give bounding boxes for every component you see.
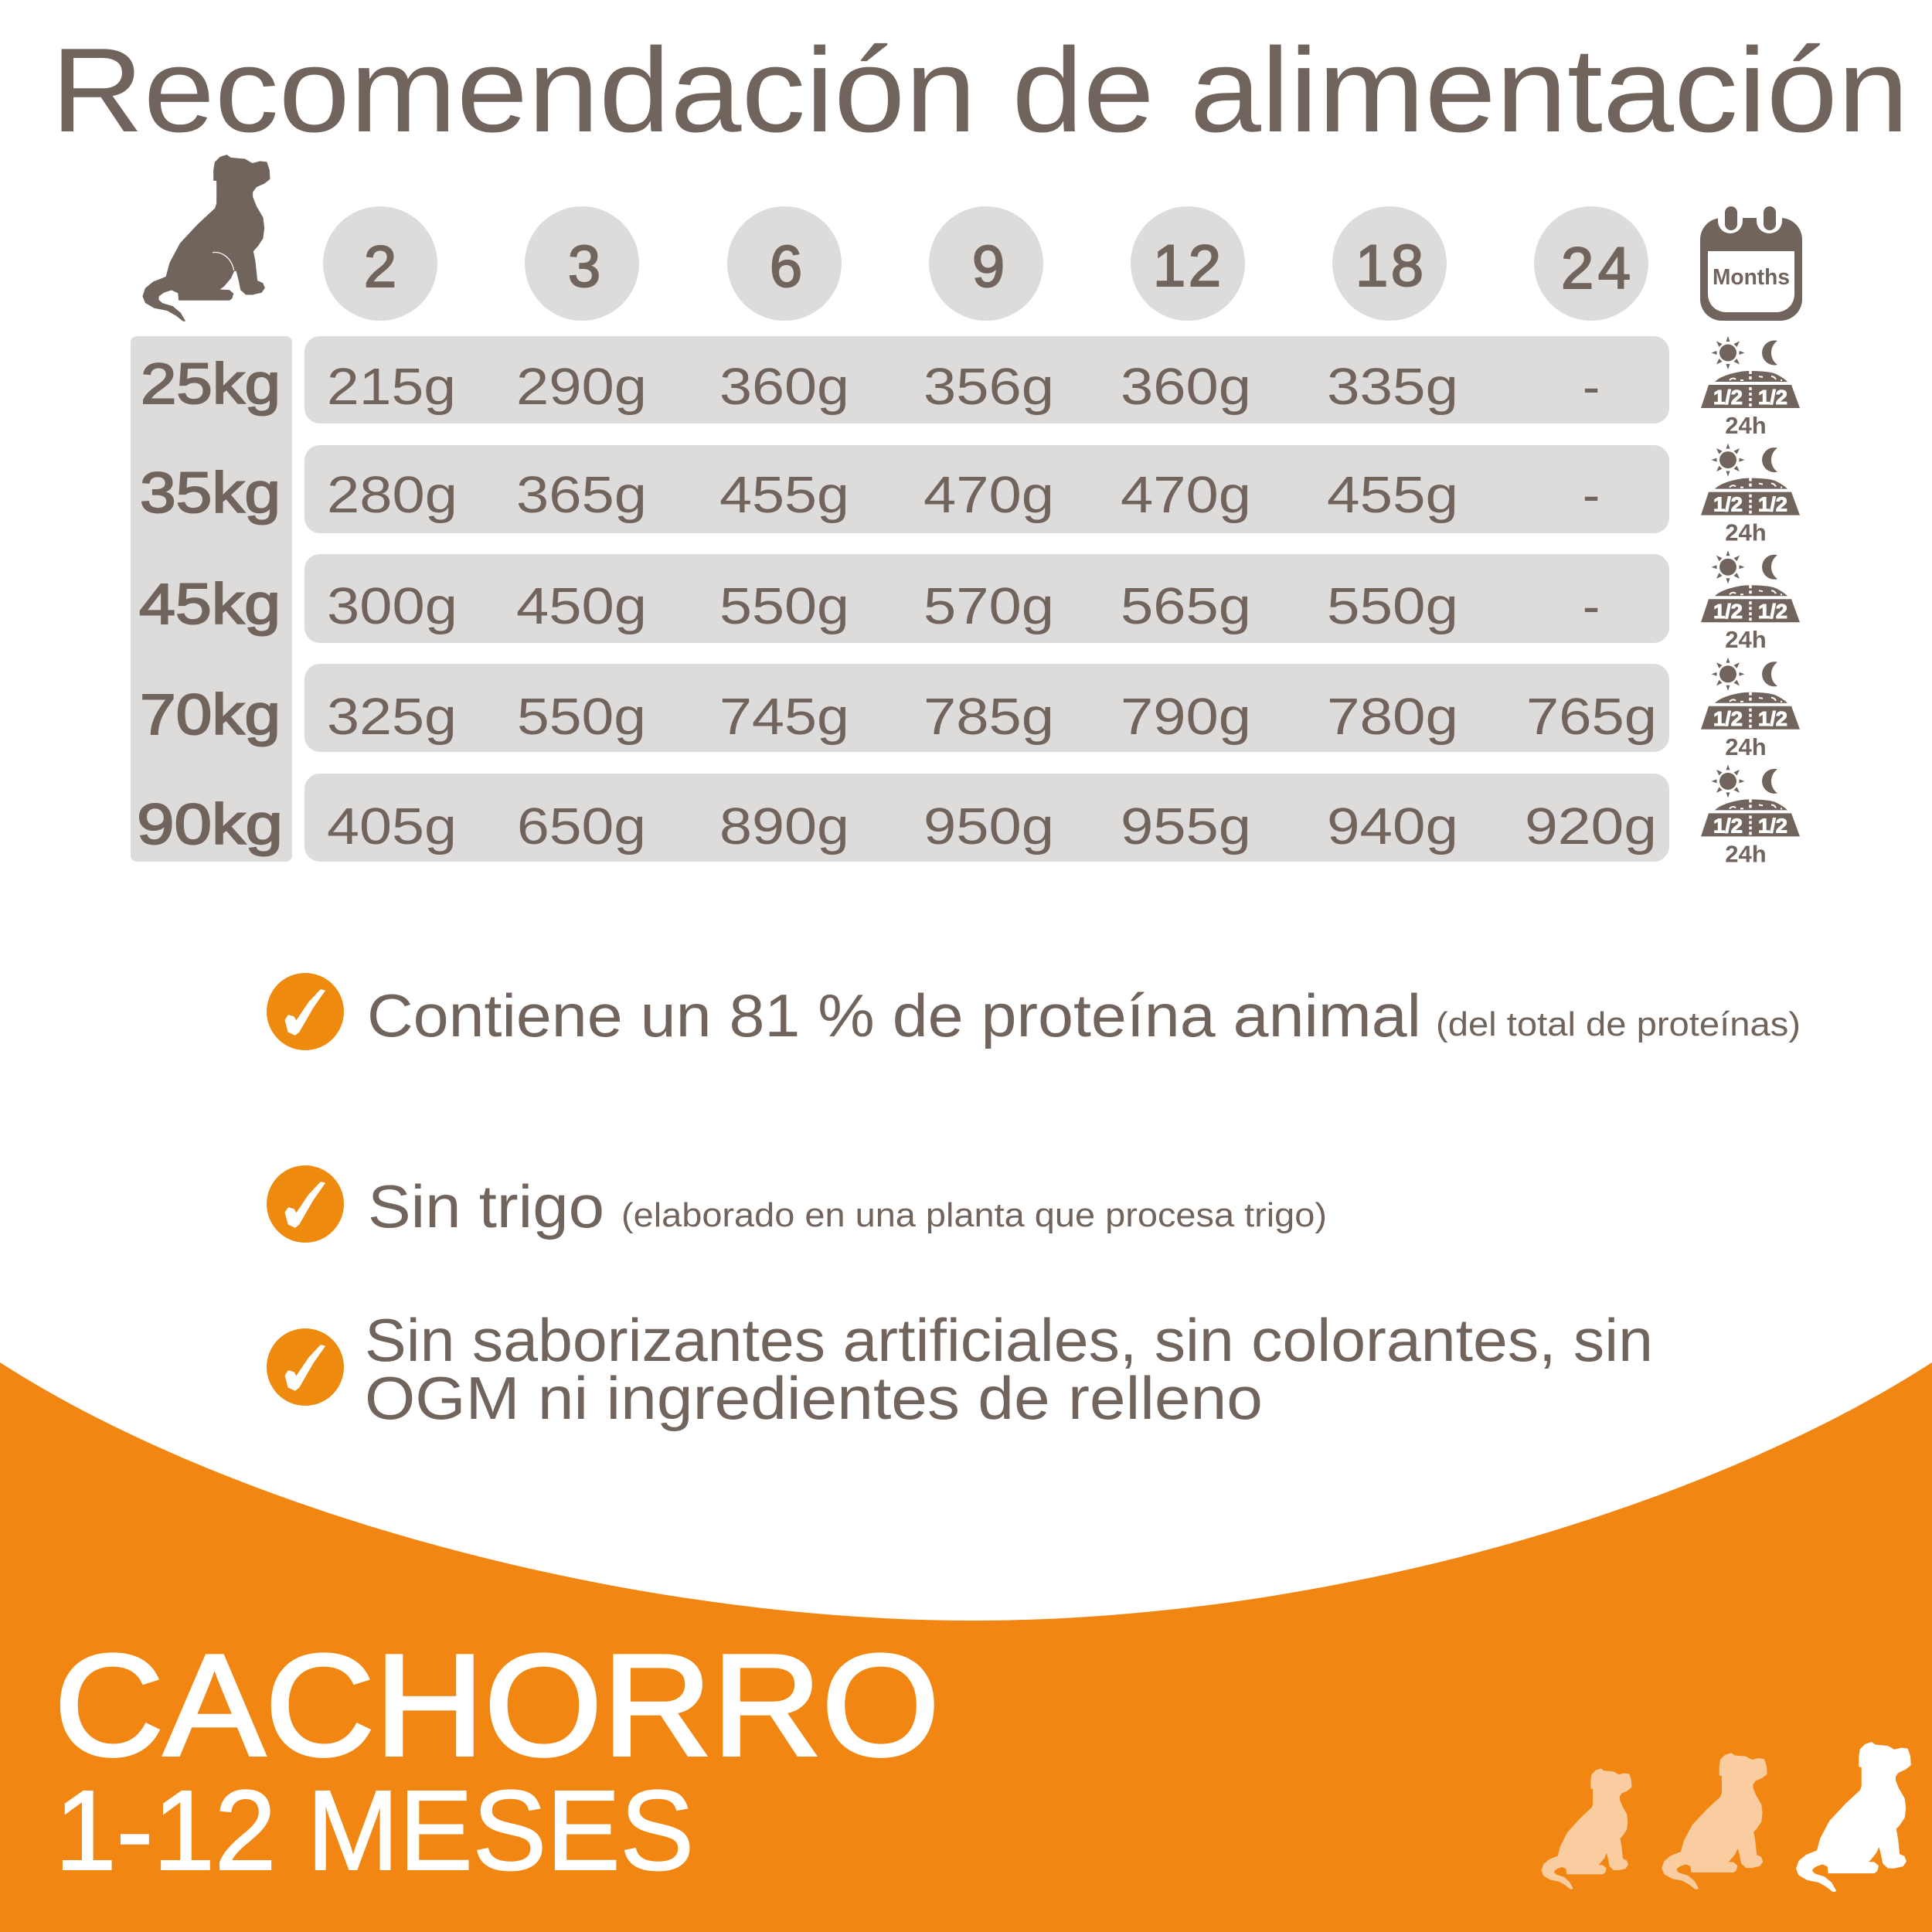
month 6 bbox=[727, 206, 842, 321]
row: 25kg bbox=[304, 336, 1669, 423]
icon: meal split row 4 bbox=[1701, 658, 1800, 760]
benefit: no wheat: (elaborado en una planta que procesa trigo) bbox=[621, 1196, 1327, 1234]
subheading: age range: 1-12 MESES bbox=[55, 1767, 694, 1894]
weight labels: 90kg bbox=[137, 792, 283, 856]
weight labels: 35kg bbox=[140, 461, 281, 525]
icon: meal split row 5: 24h bbox=[1725, 840, 1767, 867]
row: 90kg: 890g bbox=[719, 798, 849, 855]
icon: months calendar bbox=[1700, 206, 1802, 321]
icon: meal split row 3: 1/2 bbox=[1758, 600, 1787, 623]
icon: seated dog bbox=[143, 155, 270, 321]
row: 35kg: 470g bbox=[923, 466, 1054, 524]
benefit: no wheat bbox=[267, 1165, 1327, 1243]
benefit: animal protein bbox=[267, 973, 1801, 1050]
weight labels: 25kg bbox=[141, 352, 281, 416]
row: 90kg: 955g bbox=[1121, 798, 1251, 855]
row: 70kg: 790g bbox=[1121, 688, 1251, 746]
row: 90kg: 940g bbox=[1327, 798, 1458, 855]
month 18 bbox=[1332, 206, 1447, 321]
month 9: 9 bbox=[972, 234, 1005, 300]
row: 90kg: 650g bbox=[517, 798, 646, 855]
icon: meal split row 4: 24h bbox=[1725, 733, 1767, 760]
icon: meal split row 4: 1/2 bbox=[1713, 707, 1743, 730]
icon: small puppy bbox=[1543, 1770, 1631, 1888]
row: 45kg: 550g bbox=[719, 577, 849, 635]
icon: months calendar: Months bbox=[1713, 265, 1790, 290]
icon: meal split row 1: 24h bbox=[1725, 412, 1767, 439]
icon: meal split row 5: 1/2 bbox=[1713, 814, 1743, 837]
icon: meal split row 3 bbox=[1701, 550, 1800, 653]
month 3: 3 bbox=[568, 234, 600, 300]
row: 35kg: 455g bbox=[1327, 466, 1458, 524]
weight labels: 70kg bbox=[140, 682, 281, 747]
month 12 bbox=[1131, 206, 1245, 321]
row: 90kg: 920g bbox=[1525, 798, 1657, 855]
title: Recomendación de alimentación bbox=[51, 23, 1909, 157]
benefit: animal protein: (del total de proteínas) bbox=[1436, 1005, 1801, 1043]
row: 25kg: 215g bbox=[327, 358, 456, 416]
row: 45kg: - bbox=[1583, 577, 1600, 635]
month 18: 18 bbox=[1355, 233, 1423, 299]
row: 90kg: 950g bbox=[923, 798, 1054, 855]
orange curved banner bbox=[0, 1362, 1932, 1932]
month 3 bbox=[525, 206, 639, 321]
icon: meal split row 1: 1/2 bbox=[1758, 386, 1787, 409]
row: 70kg bbox=[304, 664, 1669, 752]
row: 25kg: 335g bbox=[1327, 358, 1458, 416]
row: 70kg: 765g bbox=[1526, 688, 1657, 746]
benefit: animal protein: Contiene un 81 % de proteína animal bbox=[367, 981, 1421, 1049]
row: 45kg: 300g bbox=[327, 577, 457, 635]
weight labels bbox=[137, 352, 283, 856]
row: 70kg: 325g bbox=[327, 688, 457, 746]
month 24 bbox=[1534, 206, 1648, 321]
weight column bbox=[131, 336, 292, 862]
row: 35kg: 455g bbox=[719, 466, 849, 524]
month 2 bbox=[323, 206, 437, 321]
icon: meal split row 2 bbox=[1701, 444, 1800, 546]
row: 90kg bbox=[304, 774, 1669, 862]
icon: large puppy bbox=[1798, 1743, 1910, 1890]
row: 70kg: 780g bbox=[1327, 688, 1458, 746]
row: 70kg: 785g bbox=[923, 688, 1054, 746]
icon: meal split row 3: 24h bbox=[1725, 626, 1767, 653]
row: 45kg: 565g bbox=[1121, 577, 1251, 635]
row: 45kg: 550g bbox=[1327, 577, 1458, 635]
icon: meal split row 2: 1/2 bbox=[1713, 493, 1743, 516]
row: 70kg: 550g bbox=[517, 688, 646, 746]
icon: meal split row 1: 1/2 bbox=[1713, 386, 1743, 409]
row: 35kg: 280g bbox=[327, 466, 457, 524]
row: 45kg bbox=[304, 554, 1669, 643]
benefit: no artificial additives bbox=[267, 1306, 1653, 1432]
icon: meal split row 2: 24h bbox=[1725, 519, 1767, 546]
row: 35kg: - bbox=[1583, 466, 1600, 524]
icon: meal split row 1 bbox=[1701, 336, 1800, 439]
row: 45kg: 450g bbox=[516, 577, 647, 635]
row: 25kg: 360g bbox=[1121, 358, 1251, 416]
row: 35kg: 365g bbox=[516, 466, 647, 524]
row: 35kg bbox=[304, 445, 1669, 533]
row: 25kg: - bbox=[1583, 358, 1600, 416]
month 6: 6 bbox=[770, 234, 802, 300]
row: 25kg: 356g bbox=[923, 358, 1054, 416]
icon: meal split row 5: 1/2 bbox=[1758, 814, 1787, 837]
row: 25kg: 360g bbox=[719, 358, 849, 416]
icon: meal split row 5 bbox=[1701, 764, 1800, 867]
month headers bbox=[323, 206, 1648, 321]
benefit: no artificial additives: Sin saborizantes artificiales, sin colorantes, sin bbox=[365, 1306, 1653, 1374]
benefit: no artificial additives: OGM ni ingredientes de relleno bbox=[365, 1364, 1263, 1432]
row: 25kg: 290g bbox=[516, 358, 647, 416]
weight labels: 45kg bbox=[139, 572, 281, 636]
row: 90kg: 405g bbox=[327, 798, 457, 855]
icon: meal split row 4: 1/2 bbox=[1758, 707, 1787, 730]
row: 70kg: 745g bbox=[719, 688, 849, 746]
month 12: 12 bbox=[1153, 233, 1221, 299]
icon: meal split row 2: 1/2 bbox=[1758, 493, 1787, 516]
row: 35kg: 470g bbox=[1121, 466, 1251, 524]
row: 45kg: 570g bbox=[923, 577, 1054, 635]
heading: cachorro: CACHORRO bbox=[54, 1624, 940, 1786]
month 24: 24 bbox=[1561, 236, 1631, 301]
month 2: 2 bbox=[364, 234, 396, 300]
icon: meal split row 3: 1/2 bbox=[1713, 600, 1743, 623]
month 9 bbox=[929, 206, 1043, 321]
icon: medium puppy bbox=[1663, 1754, 1766, 1888]
benefit: no wheat: Sin trigo bbox=[368, 1172, 604, 1240]
